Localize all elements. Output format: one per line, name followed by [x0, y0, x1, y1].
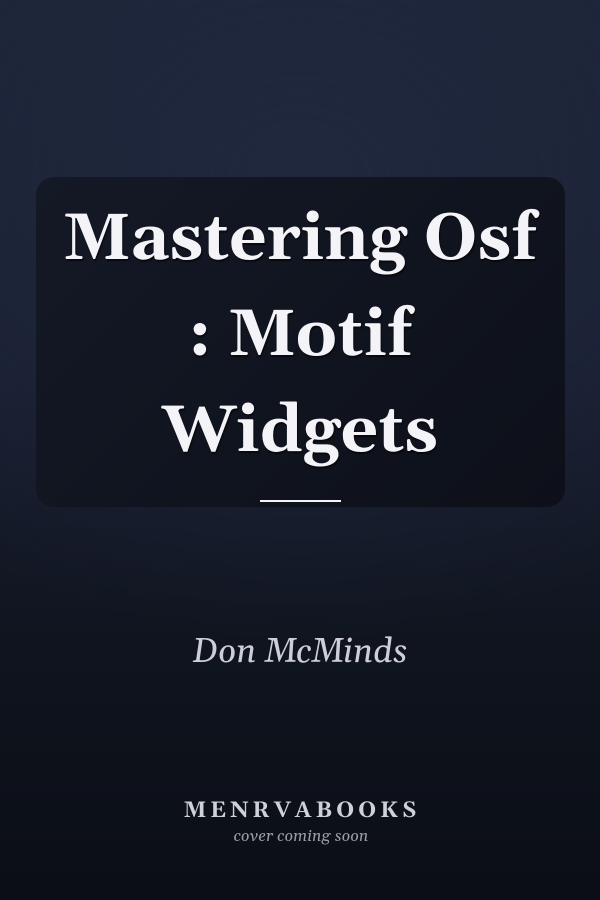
- divider: [260, 500, 341, 502]
- title: Mastering Osf: [63, 199, 537, 282]
- panel: title backdrop: [36, 177, 565, 507]
- publisher: MENRVABOOKS: [184, 797, 420, 825]
- title: : Motif: [188, 295, 412, 378]
- title: [63, 199, 540, 474]
- title: Widgets: [162, 391, 438, 474]
- tagline: cover coming soon: [234, 827, 368, 847]
- author: Don McMinds: [193, 630, 407, 674]
